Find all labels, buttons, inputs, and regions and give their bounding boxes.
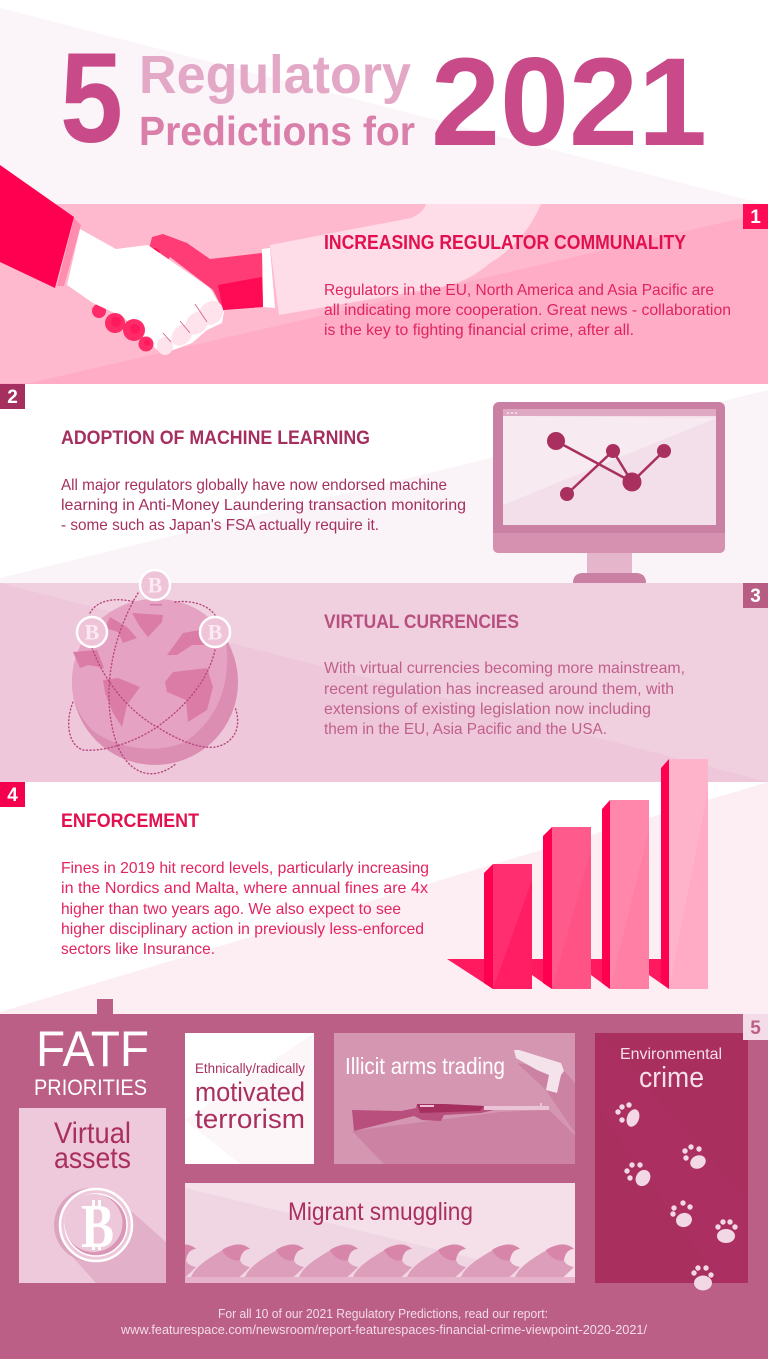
body text: in the Nordics and Malta, where annual fines are 4x	[61, 880, 428, 897]
footer text	[120, 1306, 647, 1337]
icon: pistol	[514, 1050, 564, 1093]
body text: - some such as Japan's FSA actually require it.	[61, 517, 379, 534]
icon: globe with coins: B	[208, 620, 223, 644]
icon: bitcoin coin	[54, 1188, 132, 1262]
heading: VIRTUAL CURRENCIES	[324, 612, 519, 633]
icon: globe with coins: B	[85, 620, 100, 644]
body text: higher than two years ago. We also expect to see	[61, 901, 401, 918]
card: environmental crime: crime	[639, 1062, 704, 1094]
title: Regulatory	[139, 45, 411, 105]
panel: 4 enforcement	[0, 759, 768, 1014]
title: 5	[60, 27, 123, 170]
badge 3	[743, 583, 768, 608]
panel: 5 FATF priorities	[0, 999, 768, 1359]
icon: monitor	[493, 402, 725, 583]
footer text: www.featurespace.com/newsroom/report-featurespaces-financial-crime-viewpoint-2020-2021/	[120, 1322, 647, 1337]
badge 2: 2	[7, 387, 18, 408]
card: environmental crime	[595, 1033, 748, 1290]
footer text: For all 10 of our 2021 Regulatory Predictions, read our report:	[218, 1306, 548, 1321]
icon: rifle	[352, 1103, 549, 1131]
title: 2021	[431, 33, 707, 172]
body text: all indicating more cooperation. Great news - collaboration	[324, 302, 731, 319]
icon: globe with coins: B	[148, 572, 163, 598]
badge 5	[743, 1014, 768, 1040]
badge 3: 3	[750, 586, 761, 607]
badge 2	[0, 384, 25, 409]
card: terrorism	[185, 1033, 314, 1164]
bar chart	[447, 759, 708, 989]
body text	[61, 860, 429, 958]
card: virtual assets	[19, 1108, 166, 1283]
title	[60, 27, 707, 172]
heading: INCREASING REGULATOR COMMUNALITY	[324, 232, 687, 254]
card: virtual assets: assets	[54, 1142, 131, 1175]
panel: 1 increasing regulator communality	[0, 165, 768, 384]
icon: handshake	[0, 165, 541, 355]
header background	[0, 0, 768, 205]
title: Predictions for	[139, 108, 415, 154]
body text: extensions of existing legislation now including	[324, 701, 651, 718]
body text: them in the EU, Asia Pacific and the USA.	[324, 721, 607, 738]
FATF heading	[34, 1021, 149, 1100]
card: migrant smuggling	[136, 1183, 575, 1283]
card: terrorism: motivated	[195, 1077, 305, 1107]
body text: Regulators in the EU, North America and Asia Pacific are	[324, 282, 714, 299]
body text: Fines in 2019 hit record levels, particularly increasing	[61, 860, 429, 877]
FATF heading: PRIORITIES	[34, 1075, 147, 1100]
body text: With virtual currencies becoming more mainstream,	[324, 660, 685, 677]
body text	[324, 282, 731, 339]
card: terrorism: Ethnically/radically	[195, 1060, 305, 1076]
icon: bitcoin coin: B	[81, 1193, 114, 1261]
panel: 3 virtual currencies	[0, 570, 768, 782]
body text: recent regulation has increased around them, with	[324, 681, 674, 698]
card: illicit arms trading	[334, 1033, 575, 1164]
icon: globe with coins	[69, 570, 238, 774]
FATF heading: FATF	[36, 1021, 149, 1077]
card: virtual assets: Virtual	[54, 1117, 131, 1150]
heading: ENFORCEMENT	[61, 811, 199, 832]
body text: learning in Anti-Money Laundering transaction monitoring	[61, 497, 466, 514]
badge 4: 4	[7, 785, 18, 806]
panel: 2 adoption of machine learning	[0, 384, 768, 583]
body text: sectors like Insurance.	[61, 941, 215, 958]
badge 1: 1	[750, 207, 761, 228]
body text	[61, 477, 466, 534]
heading: ADOPTION OF MACHINE LEARNING	[61, 428, 370, 449]
card: environmental crime: Environmental	[620, 1046, 722, 1063]
line chart	[547, 432, 671, 501]
badge 1	[743, 204, 768, 229]
card: terrorism: terrorism	[195, 1104, 305, 1134]
badge 4	[0, 782, 25, 807]
icon: waves	[185, 1244, 575, 1283]
body text	[324, 660, 685, 738]
icon: paw prints	[615, 1102, 738, 1290]
card: illicit arms trading: Illicit arms trading	[345, 1053, 505, 1079]
body text: All major regulators globally have now endorsed machine	[61, 477, 447, 494]
body text: higher disciplinary action in previously less-enforced	[61, 921, 424, 938]
badge 5: 5	[750, 1018, 761, 1039]
body text: is the key to fighting financial crime, after all.	[324, 322, 634, 339]
card: migrant smuggling: Migrant smuggling	[288, 1198, 473, 1226]
